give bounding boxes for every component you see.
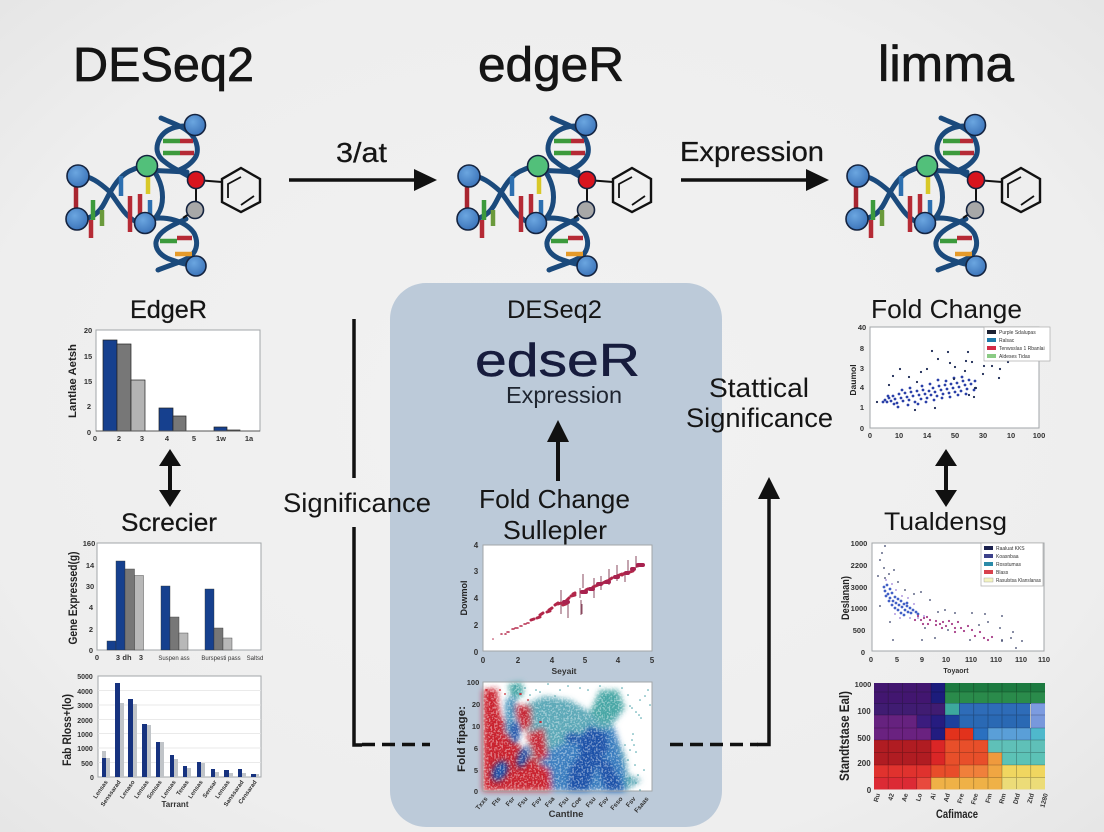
legend: Ralsac [999, 338, 1015, 344]
panel label: Fold Change: Fold Change [479, 484, 630, 514]
scatter chart: decay: 110 [1038, 655, 1050, 664]
heatmap: 0 [867, 786, 872, 795]
legend: Tenwsslas 1 Rbanlai [999, 346, 1045, 352]
scatter chart: fold change [848, 323, 1050, 440]
bar chart: Gene expression: Suspen ass [158, 656, 190, 662]
scatter chart: dense clusters: 0 [474, 787, 478, 796]
scatter chart: decay: 1000 [851, 604, 867, 613]
scatter chart: dense clusters: Fsv [531, 795, 544, 809]
scatter chart: linear trend: 5 [583, 656, 588, 665]
scatter chart: dense clusters: 100 [467, 678, 479, 687]
bar chart: Fab Rloss: 2000 [77, 718, 93, 725]
scatter chart: decay: Deslanan) [840, 576, 852, 620]
scatter chart: dense clusters: Fsu [517, 796, 530, 809]
bar chart: Gene expression: dh [122, 653, 132, 662]
arrow label: Expression: Expression [680, 136, 824, 167]
bar chart: Gene expression: Gene Expressed(g) [68, 551, 80, 644]
heatmap: Fee [970, 792, 980, 805]
heatmap: 42 [887, 792, 896, 802]
scatter chart: linear trend: 2 [516, 656, 521, 665]
scatter chart: linear trend: 4 [474, 594, 479, 603]
bar chart: Fab Rloss: Lensas [188, 779, 205, 800]
scatter chart: dense clusters: 6 [474, 744, 478, 753]
heatmap: Rm [998, 793, 1008, 805]
bar chart: Fab Rloss: Lensas [161, 779, 178, 800]
bar chart: EdgeR [67, 326, 260, 443]
bar chart: Gene expression: 4 [89, 603, 94, 612]
bar chart: EdgeR: 2 [117, 434, 121, 443]
label: Significance left: Significance [283, 488, 431, 518]
arrow: double vertical left [159, 449, 181, 507]
bar chart: EdgeR: 0 [93, 434, 97, 443]
heading: Tualdensg: Tualdensg [884, 508, 1007, 536]
scatter chart: fold change: 10 [895, 431, 903, 440]
scatter chart: fold change: 4 [860, 383, 865, 392]
bar chart: EdgeR: 5 [192, 434, 196, 443]
bar chart: EdgeR: Lantlae Aetsh [67, 344, 79, 418]
bar chart: Fab Rloss [60, 674, 261, 809]
bar chart: EdgeR: 0 [87, 428, 91, 437]
heatmap: Standtstase Eal) [837, 691, 852, 781]
legend [981, 543, 1043, 586]
scatter chart: linear trend [459, 541, 655, 676]
bar chart: Gene expression: 2 [89, 625, 93, 634]
bar chart: Fab Rloss: Tarrant [162, 800, 189, 809]
panel heading: edseR: edseR [475, 334, 640, 386]
heatmap: Ztd [1027, 793, 1036, 804]
heatmap: Ad [943, 793, 952, 803]
title: limma: limma [878, 36, 1014, 92]
scatter chart: dense clusters: Fsa [544, 795, 557, 809]
scatter chart: decay: 2200 [851, 561, 867, 570]
scatter chart: fold change: 50 [951, 431, 959, 440]
legend: Rosstumas [996, 562, 1022, 568]
bar chart: Gene expression: 3 [139, 653, 143, 662]
heatmap: Dtd [1012, 793, 1022, 805]
legend [984, 327, 1050, 361]
bar chart: EdgeR: 2 [87, 402, 91, 411]
scatter chart: fold change: Daumol [848, 364, 858, 396]
scatter chart: fold change: 40 [858, 323, 866, 332]
heading: EdgeR: EdgeR [130, 296, 207, 324]
legend: Raaluat KKS [996, 546, 1025, 552]
scatter chart: decay: 110 [990, 655, 1002, 664]
scatter chart: decay: 110 [1015, 655, 1027, 664]
scatter chart: dense clusters: Txxs [475, 796, 490, 812]
panel heading: DESeq2: DESeq2 [507, 296, 602, 324]
bar chart: Fab Rloss: Sanssarad [223, 779, 246, 808]
icon: DNA molecule limma [846, 114, 1040, 276]
scatter chart: dense clusters: Fsv [598, 795, 611, 809]
scatter chart: linear trend: 3 [474, 567, 479, 576]
bar chart: Fab Rloss: Sensar [202, 779, 219, 800]
heatmap [837, 680, 1050, 821]
scatter chart: dense clusters: Fts [491, 795, 503, 808]
heatmap: 100 [857, 707, 871, 716]
bar chart: Fab Rloss: 4000 [77, 689, 93, 696]
heatmap: Fre [957, 792, 966, 804]
heading: Screcier: Screcier [121, 509, 217, 537]
arrow: edgeR to limma [681, 169, 829, 191]
heatmap: Ae [901, 792, 910, 803]
bar chart: Fab Rloss: Senssarad [100, 779, 123, 808]
scatter chart: decay: 110 [965, 655, 977, 664]
legend: Koasnbaa [996, 554, 1019, 560]
scatter chart: decay [840, 539, 1050, 675]
bar chart: Gene expression: 160 [83, 539, 95, 548]
legend: Aldeses Tidas [999, 354, 1031, 360]
title: DESeq2: DESeq2 [73, 39, 254, 92]
scatter chart: decay: 10 [942, 655, 950, 664]
panel sub-heading: Expression: Expression [506, 382, 622, 408]
bar chart: Fab Rloss: 0 [90, 775, 94, 782]
scatter chart: decay: 1000 [851, 539, 867, 548]
arrow: double vertical right [935, 449, 957, 507]
bar chart: Fab Rloss: Lensas [93, 779, 110, 800]
bar chart: EdgeR: 1w [216, 434, 226, 443]
scatter chart: linear trend: Seyait [551, 666, 577, 676]
panel label: Sullepler: Sullepler [503, 515, 607, 545]
scatter chart: fold change: 100 [1033, 431, 1045, 440]
scatter chart: dense clusters: Fsaas [633, 795, 651, 814]
bar chart: Gene expression: Saltsd [247, 656, 263, 662]
bar chart: Gene expression: 30 [86, 582, 94, 591]
scatter chart: dense clusters: Fold fipage: [456, 706, 468, 772]
scatter chart: fold change: 1 [860, 403, 864, 412]
scatter chart: decay: 0 [869, 655, 873, 664]
bar chart: EdgeR: 3 [140, 434, 144, 443]
heatmap: 1000 [855, 680, 871, 689]
title: edgeR: edgeR [478, 39, 624, 92]
scatter chart: linear trend: 5 [650, 656, 655, 665]
scatter chart: fold change: 3 [860, 364, 864, 373]
legend: Rasulstsa Klanslanas [996, 578, 1041, 584]
scatter chart: fold change: 30 [979, 431, 987, 440]
bar chart: EdgeR: 4 [165, 434, 170, 443]
bar chart: Fab Rloss: 500 [81, 761, 93, 768]
bar chart: Fab Rloss: 1000 [77, 732, 93, 739]
arrow: DESeq2 to edgeR [289, 169, 437, 191]
bar chart: Fab Rloss: Fab Rloss+(lo) [60, 694, 74, 766]
scatter chart: linear trend: 4 [550, 656, 555, 665]
legend: Blass [996, 570, 1009, 576]
bar chart: Gene expression: 3 [116, 653, 120, 662]
scatter chart: fold change: 8 [860, 344, 864, 353]
scatter chart: dense clusters: Fsv [625, 795, 638, 809]
bar chart: Fab Rloss: Lenaso [120, 779, 137, 800]
heatmap: Fm [985, 792, 994, 804]
scatter chart: decay: 3000 [851, 583, 867, 592]
bar chart: Gene expression [68, 539, 263, 662]
bar chart: Fab Rloss: Sonsas [146, 779, 164, 801]
scatter chart: linear trend: 0 [481, 656, 486, 665]
heatmap: 500 [857, 734, 871, 743]
scatter chart: fold change: 0 [860, 424, 864, 433]
scatter chart: dense clusters [456, 678, 652, 820]
scatter chart: fold change: 10 [1007, 431, 1015, 440]
label: Statistical Significance: Stattical [709, 373, 809, 403]
scatter chart: decay: 5 [895, 655, 899, 664]
bar chart: EdgeR: 1a [245, 434, 254, 443]
heatmap: 200 [857, 759, 871, 768]
icon: DNA molecule DESeq2 [66, 114, 260, 276]
scatter chart: linear trend: Dowmol [459, 580, 469, 616]
scatter chart: decay: 500 [853, 626, 865, 635]
bar chart: Fab Rloss: Censarad [238, 779, 259, 806]
scatter chart: dense clusters: Coe [570, 795, 584, 810]
bar chart: EdgeR: 20 [84, 326, 92, 335]
bar chart: Gene expression: 0 [95, 653, 99, 662]
scatter chart: dense clusters: Fsu [558, 796, 571, 809]
bar chart: EdgeR: 15 [84, 352, 92, 361]
scatter chart: dense clusters: 5 [474, 766, 478, 775]
scatter chart: dense clusters: Fsso [609, 796, 625, 812]
bar chart: Gene expression: 14 [86, 561, 95, 570]
scatter chart: dense clusters: Fsu [585, 796, 598, 809]
heatmap: Ai [929, 793, 938, 801]
bar chart: Fab Rloss: Tenas [176, 779, 191, 797]
heading: Fold Change right: Fold Change [871, 294, 1022, 324]
bar chart: EdgeR: 15 [84, 377, 92, 386]
bar chart: Fab Rloss: 5000 [77, 674, 93, 681]
bar chart: Fab Rloss: Lensas [134, 779, 151, 800]
scatter chart: decay: Toyaort [943, 668, 969, 675]
scatter chart: linear trend: 4 [616, 656, 621, 665]
connector: significance line with dashed run [354, 319, 430, 745]
scatter chart: dense clusters: Cantlne [549, 809, 583, 820]
bar chart: Fab Rloss: Lensas [215, 779, 232, 800]
scatter chart: decay: 0 [861, 648, 865, 657]
bar chart: Gene expression: 0 [89, 646, 93, 655]
scatter chart: dense clusters: Fsr [505, 795, 517, 808]
scatter chart: linear trend: 4 [474, 541, 479, 550]
scatter chart: dense clusters: 20 [472, 700, 480, 709]
scatter chart: fold change: 0 [868, 431, 872, 440]
label: Statistical Significance: Significance [686, 403, 833, 433]
scatter chart: decay: 9 [920, 655, 924, 664]
legend: Purple Sdalupas [999, 330, 1036, 336]
icon: DNA molecule edgeR [457, 114, 651, 276]
heatmap: Lo [915, 793, 924, 802]
panel: central highlighted column [390, 283, 722, 827]
heatmap: 1280 [1039, 792, 1050, 808]
bar chart: Fab Rloss: 3000 [77, 703, 93, 710]
heatmap: Ru [873, 793, 882, 803]
bar chart: Gene expression: Burspesti pass [201, 656, 241, 662]
scatter chart: linear trend: 2 [474, 621, 479, 630]
bar chart: Fab Rloss: 1000 [77, 746, 93, 753]
arrow: up to Expression [547, 420, 569, 481]
heatmap: Cafimace [936, 809, 978, 821]
scatter chart: linear trend: 0 [474, 648, 479, 657]
arrow label: 3/at: 3/at [336, 137, 387, 168]
scatter chart: fold change: 14 [923, 431, 932, 440]
connector: significance dashed to upward arrow [670, 477, 780, 744]
label: Statistical Significance [686, 373, 833, 433]
scatter chart: dense clusters: 10 [472, 722, 480, 731]
